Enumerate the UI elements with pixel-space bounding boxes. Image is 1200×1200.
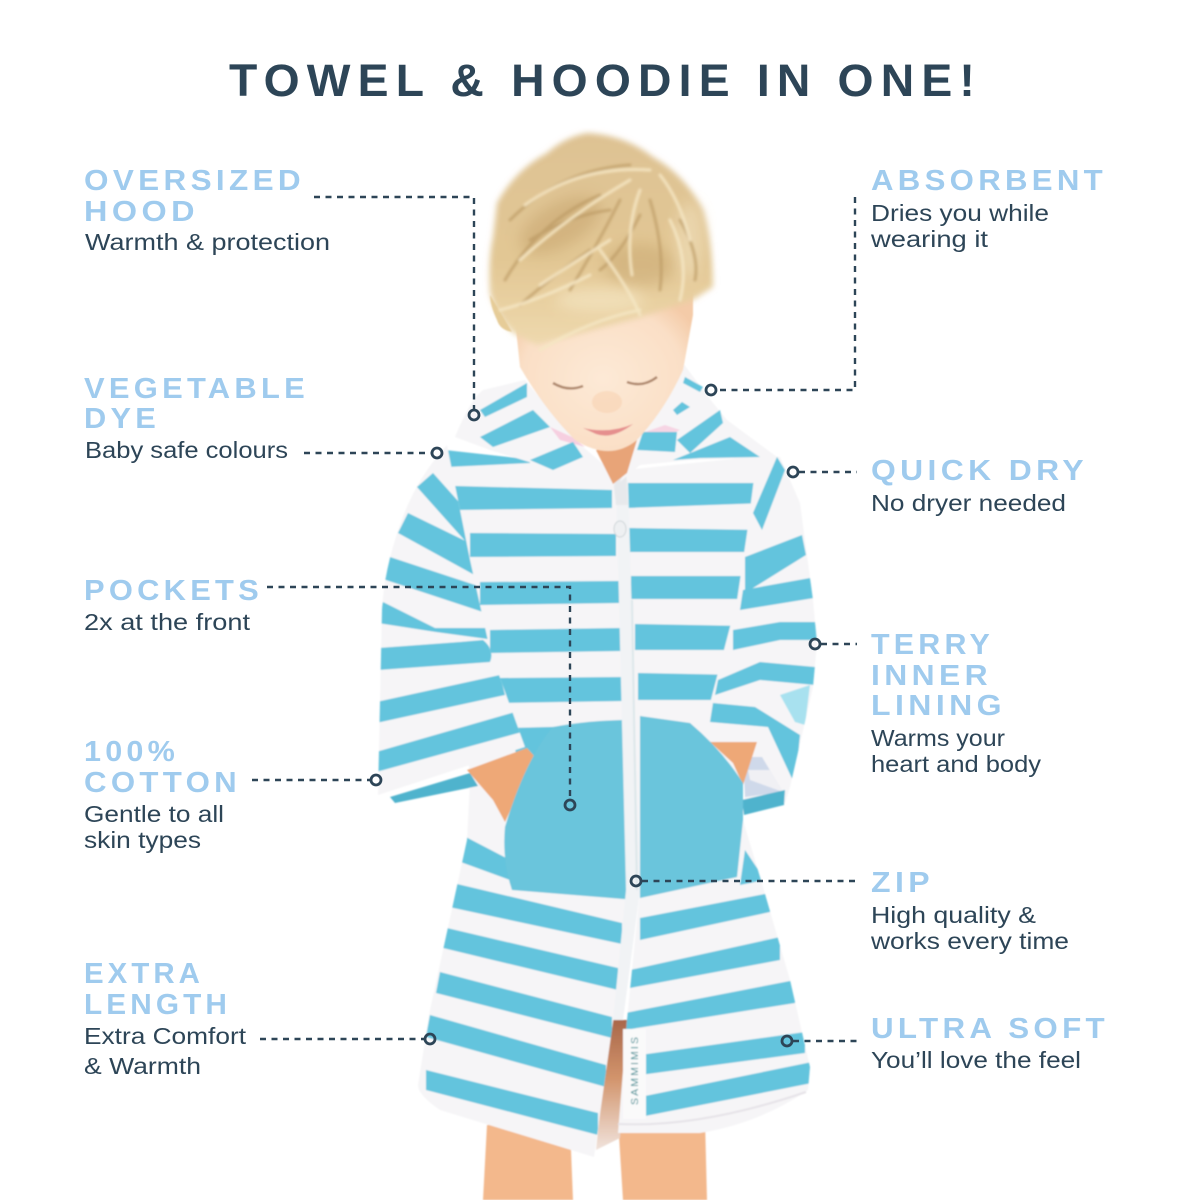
heading: extra length — [84, 958, 231, 1021]
text: warms: Warms your — [871, 725, 1005, 751]
leader line: pockets — [267, 587, 575, 810]
callout: absorbent — [706, 165, 1107, 395]
callout: ultra soft — [782, 1013, 1109, 1073]
heading: extra length: LENGTH — [84, 989, 231, 1021]
text: warms: heart and body — [871, 751, 1042, 777]
legs — [483, 1020, 707, 1200]
heading: pockets: POCKETS — [84, 575, 263, 607]
robe body left panel — [418, 450, 640, 1157]
brand label — [623, 1029, 646, 1119]
heading: oversized hood — [84, 165, 305, 228]
brand label: SAMMIMIS — [629, 1037, 641, 1105]
text: quality — [870, 902, 1069, 954]
callout: extra length — [84, 958, 435, 1079]
text: gentle: Gentle to all — [84, 801, 224, 827]
heading: vegetable dye — [84, 373, 309, 435]
callout: cotton — [84, 736, 381, 853]
heading: cotton: 100% — [84, 736, 179, 768]
heading: terry inner lining: LINING — [871, 690, 1006, 722]
hood — [455, 363, 777, 485]
leader line: quick dry — [788, 467, 857, 477]
kangaroo pockets — [504, 716, 743, 900]
leader line: length — [260, 1034, 435, 1044]
leader line: absorbent — [706, 197, 855, 395]
callout: quick dry — [788, 455, 1088, 516]
text: comfort: & Warmth — [84, 1053, 201, 1079]
text: feel: You’ll love the feel — [871, 1047, 1081, 1073]
text: comfort: Extra Comfort — [84, 1023, 247, 1049]
text: gentle — [84, 801, 224, 853]
heading: terry inner lining — [871, 629, 1006, 722]
text: dries: Dries you while — [871, 200, 1049, 226]
heading: vegetable dye: DYE — [84, 403, 160, 435]
hands — [467, 742, 757, 822]
heading: vegetable dye: VEGETABLE — [84, 373, 309, 405]
heading: zip: ZIP — [871, 867, 934, 899]
photo: child wearing striped hooded towel — [376, 133, 818, 1200]
robe body right panel — [618, 455, 812, 1133]
heading: ultra soft: ULTRA SOFT — [871, 1013, 1109, 1045]
heading: terry inner lining: TERRY — [871, 629, 994, 661]
face — [513, 290, 693, 451]
callout: pockets — [84, 575, 575, 810]
text: gentle: skin types — [84, 827, 201, 853]
hair — [489, 133, 713, 350]
callout: oversized hood — [84, 165, 479, 420]
text: dries: wearing it — [870, 226, 989, 252]
leader line: ultra soft — [782, 1036, 857, 1046]
text: front: 2x at the front — [84, 609, 251, 635]
callout: zip — [631, 867, 1069, 954]
heading: cotton: COTTON — [84, 767, 241, 799]
neck — [596, 440, 637, 484]
heading: oversized hood: HOOD — [84, 196, 199, 228]
text: comfort — [84, 1023, 247, 1079]
heading: oversized hood: OVERSIZED — [84, 165, 305, 197]
text: quality: High quality & — [871, 902, 1036, 928]
leader line: dye — [304, 448, 442, 458]
callout: terry lining — [810, 629, 1042, 777]
text: warmth: Warmth & protection — [85, 229, 330, 255]
zip — [612, 468, 640, 1020]
text: dries — [870, 200, 1049, 252]
text: no dryer: No dryer needed — [871, 490, 1066, 516]
heading: absorbent: ABSORBENT — [871, 165, 1107, 197]
heading: extra length: EXTRA — [84, 958, 204, 990]
text: baby safe: Baby safe colours — [85, 437, 288, 463]
leader line: zip — [631, 876, 857, 886]
leader line: terry — [810, 639, 857, 649]
right sleeve — [703, 455, 818, 815]
leader line: hood — [314, 197, 479, 420]
text: quality: works every time — [870, 928, 1069, 954]
heading: quick dry: QUICK DRY — [871, 455, 1088, 487]
heading: cotton — [84, 736, 241, 799]
left sleeve — [376, 445, 525, 803]
leader line: cotton — [252, 775, 381, 785]
title: TOWEL & HOODIE IN ONE! — [229, 55, 982, 106]
text: warms — [871, 725, 1042, 777]
heading: terry inner lining: INNER — [871, 660, 992, 692]
callout: vegetable dye — [84, 373, 442, 463]
